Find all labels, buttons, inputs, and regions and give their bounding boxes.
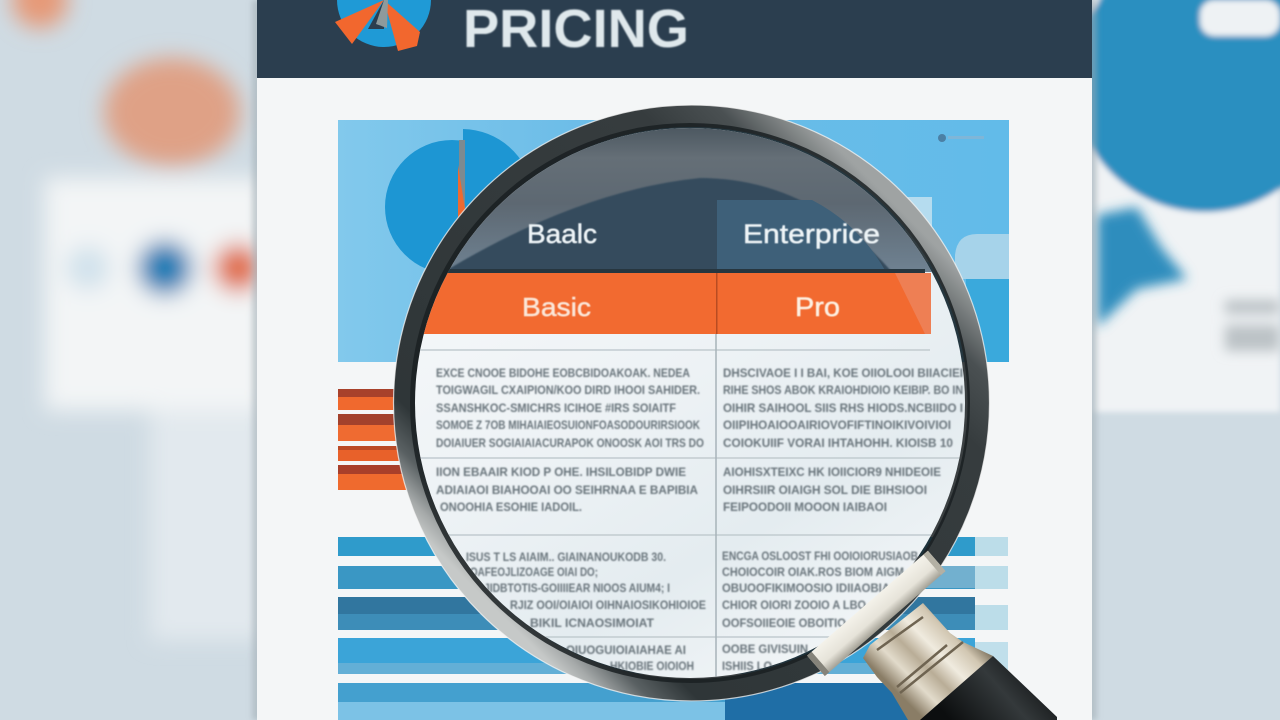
icon: pie chart	[385, 129, 533, 274]
table text: left column: ISUS T LS AIAIM.. GIAINANOUKODB 30.	[466, 552, 666, 564]
table text: right column: AIOHISXTEIXC HK IOIICIOR9 NHIDEOIE	[723, 467, 941, 479]
lens tinted top reflection	[448, 128, 932, 272]
cell: Enterprice: Enterprice	[743, 219, 880, 249]
table text: right column: ISHIIS LO	[722, 661, 772, 673]
icon: header pie logo	[335, 0, 431, 51]
blurred right poster	[1073, 0, 1280, 412]
table text: left column: BIKIL ICNAOSIMOIAT	[530, 618, 654, 630]
table text: left column: RJIZ OOI/OIAIOI OIHNAIOSIKOHIOIOE	[510, 600, 706, 612]
handle metal ferrule	[863, 603, 993, 720]
table text: right column: DHSCIVAOE I I BAI, KOE OIIOLOOI BIIACIEI	[723, 368, 963, 380]
table text: right column: OIHRSIIR OIAIGH SOL DIE BIHSIOOI	[723, 485, 927, 497]
table text: right column: RIHE SHOS ABOK KRAIOHDIOIO KEIBIP. BO IN	[723, 385, 963, 397]
table text: left column: ONOOHIA ESOHIE IADOIL.	[440, 502, 582, 514]
hero blue panel	[338, 120, 1009, 362]
table text: right column: OOBE GIVISUIN	[722, 644, 808, 656]
table text: left column: OIUOGUIOIAIAHAE AI	[566, 645, 686, 657]
table text: left column: JIDBTOTIS-GOIIIIEAR NIOOS AIUM4; I	[484, 583, 670, 595]
table text: left column: SSANSHKOC-SMICHRS ICIHOE #IRS SOIAITF	[436, 403, 676, 415]
lens contents	[400, 120, 980, 690]
table text: left column: IION EBAAIR KIOD P OHE. IHSILOBIDP DWIE	[436, 467, 686, 479]
table text: left column: TOIGWAGIL CXAIPION/KOO DIRD IHOOI SAHIDER.	[436, 385, 700, 397]
table text: left column: ADIAIAOI BIAHOOAI OO SEIHRNAA E BAPIBIA	[436, 485, 698, 497]
table text: left column: DOIAIUER SOGIAIAIACURAPOK ONOOSK AOI TRS DO	[436, 438, 704, 450]
table text: right column: COIOKUIIF VORAI IHTAHOHH. KIOISB 10	[723, 438, 953, 450]
table text: left column: EXCE CNOOE BIDOHE EOBCBIDOAKOAK. NEDEA	[436, 368, 690, 380]
heading: PRICING: PRICING	[463, 0, 689, 59]
lens outer ring	[404, 116, 978, 690]
magnifying glass handle	[863, 603, 1057, 720]
magnifying glass lens	[394, 105, 990, 701]
poster page	[252, 0, 1097, 720]
poster header band	[257, 0, 1092, 78]
cell: Basic: Basic	[522, 292, 591, 322]
table text: right column: OIHIR SAIHOOL SIIS RHS HIODS.NCBIIDO I	[723, 403, 963, 415]
blurred left poster	[12, 0, 270, 640]
table header row: dark	[400, 200, 925, 273]
table text: right column	[722, 368, 963, 673]
table text: right column: CHIOR OIORI ZOOIO A LBO	[722, 600, 866, 612]
table text: right column: OIIPIHOAIOOAIRIOVOFIFTINOIKIVOIVIOI	[723, 420, 951, 432]
table text: right column: OOFSOIIEOIE OBOITIO	[722, 618, 846, 630]
blue bar stripes	[338, 537, 1008, 720]
decorative skyline shapes	[905, 134, 1009, 362]
table text: right column: ENCGA OSLOOST FHI OOIOIORUSIAOB	[722, 551, 918, 563]
orange bar stripes	[338, 389, 408, 490]
table text: right column: OBUOOFIKIMOOSIO IDIIAOBIA	[722, 583, 890, 595]
table text: right column: FEIPOODOII MOOON IAIBAOI	[723, 502, 887, 514]
table text: left column: SOMOE Z 7OB MIHAIAIEOSUIONFOASODOURIRSIOOK	[436, 420, 701, 432]
table header row: orange	[400, 273, 931, 334]
cell: Baalc: Baalc	[527, 219, 597, 249]
table text: right column: CHOIOCOIR OIAK.ROS BIOM AIGM	[722, 567, 904, 579]
lens collar clamp	[807, 551, 946, 676]
table text: left column: OAFEOJLIZOAGE OIAI DO;	[470, 567, 598, 579]
table text: left column	[436, 368, 706, 673]
handle black grip	[920, 656, 1057, 720]
cell: Pro: Pro	[795, 292, 840, 322]
table text: left column: HKIOBIE OIOIOH	[610, 661, 694, 673]
table grid lines	[420, 334, 965, 690]
